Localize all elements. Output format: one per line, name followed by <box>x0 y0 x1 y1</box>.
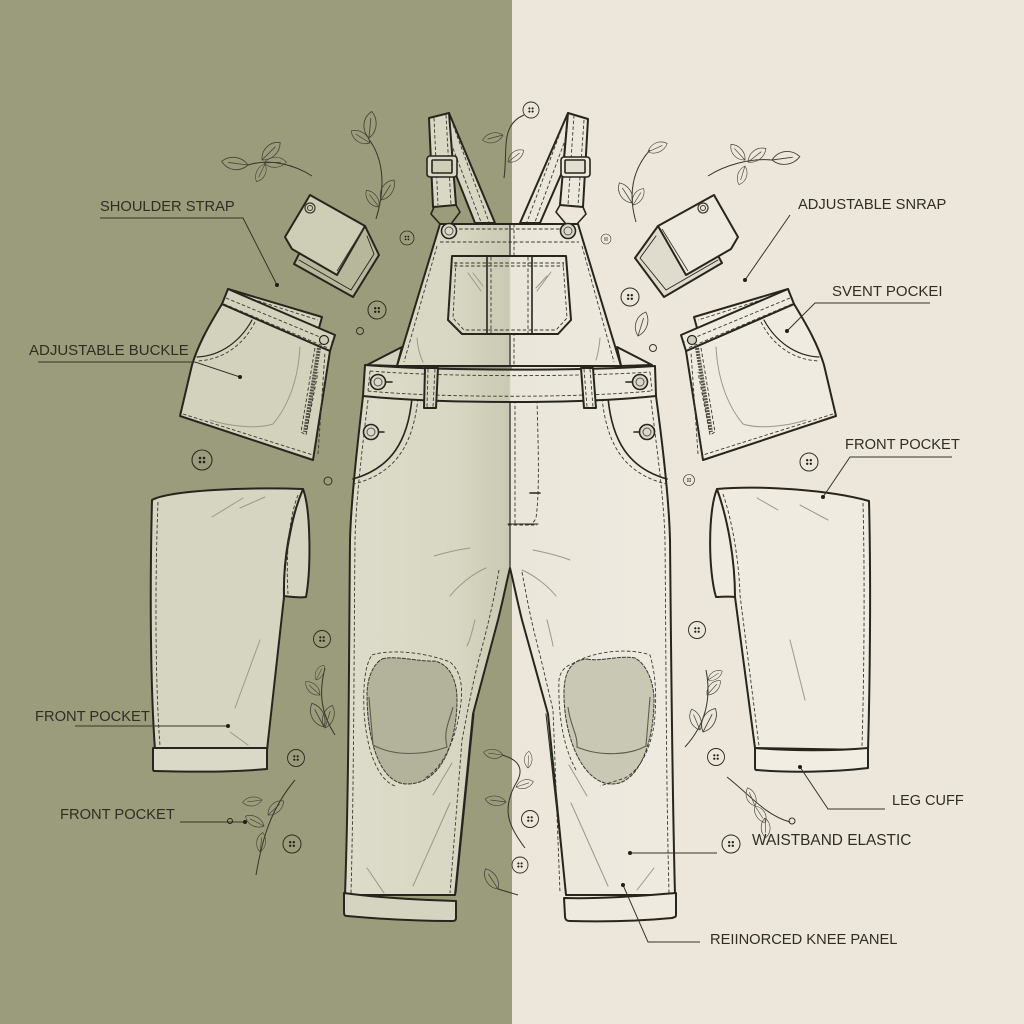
left strap <box>427 113 495 224</box>
right detached leg <box>710 488 870 772</box>
right leg cuff <box>564 893 676 921</box>
sprig: bottom right <box>727 777 795 838</box>
callout: adjustable buckle: ADJUSTABLE BUCKLE <box>29 342 189 359</box>
right strap <box>520 113 590 224</box>
callout: front pocket left lower <box>60 807 247 824</box>
callout: shoulder strap <box>100 199 279 287</box>
sprig: lower right <box>685 668 724 747</box>
belt loop right <box>581 368 596 408</box>
callout: svent pockei: SVENT POCKEI <box>832 283 943 300</box>
left detached leg <box>151 488 309 772</box>
loose buttons <box>192 102 818 873</box>
callout: waistband elastic <box>628 832 911 855</box>
sprig: lower left <box>303 663 338 735</box>
botanical sprigs <box>221 111 800 895</box>
callout: front pocket left lower: FRONT POCKET <box>60 807 175 823</box>
right knee patch <box>559 651 656 786</box>
side back panels <box>367 347 652 366</box>
callout: reinforced knee panel: REIINORCED KNEE PANEL <box>710 932 897 948</box>
callout: adjustable buckle <box>29 342 242 379</box>
callout: waistband elastic: WAISTBAND ELASTIC <box>752 832 911 849</box>
belt loop left <box>424 368 438 408</box>
callout: shoulder strap: SHOULDER STRAP <box>100 199 235 215</box>
callout: front pocket left upper: FRONT POCKET <box>35 709 150 725</box>
callout: svent pockei <box>785 283 943 333</box>
right detached short piece <box>681 289 836 460</box>
sprig: top centre <box>482 115 526 178</box>
left flap piece <box>285 195 379 297</box>
sprig: bottom centre <box>483 748 535 848</box>
callout: front pocket right: FRONT POCKET <box>845 437 960 453</box>
callout: leg cuff <box>798 765 964 809</box>
sprig: top left <box>221 138 312 184</box>
left detached short piece <box>180 289 335 460</box>
left leg cuff <box>344 893 456 921</box>
callout: adjustable snrap: ADJUSTABLE SNRAP <box>798 197 946 213</box>
sprig: upper left vertical <box>348 111 398 219</box>
overalls main garment <box>344 113 676 921</box>
legs and hips <box>345 396 675 895</box>
callout: leg cuff: LEG CUFF <box>892 793 964 809</box>
garment rivets and buttons <box>364 224 654 440</box>
bib <box>397 224 621 366</box>
sprig: small single leaf <box>632 310 651 338</box>
callout: reinforced knee panel <box>621 883 897 948</box>
callout: front pocket right <box>821 437 960 499</box>
sprig: bottom small <box>481 866 518 895</box>
right flap piece <box>635 195 738 297</box>
callout: adjustable snrap <box>743 197 946 282</box>
sprig: upper right vertical <box>615 139 669 222</box>
background right panel <box>512 0 1024 1024</box>
sprig: bottom left <box>242 780 295 875</box>
bib pocket <box>448 256 571 334</box>
left knee patch <box>364 652 462 786</box>
background left panel <box>0 0 512 1024</box>
sprig: top right <box>708 141 800 186</box>
waistband <box>363 365 656 402</box>
callout: front pocket left upper <box>35 709 230 728</box>
